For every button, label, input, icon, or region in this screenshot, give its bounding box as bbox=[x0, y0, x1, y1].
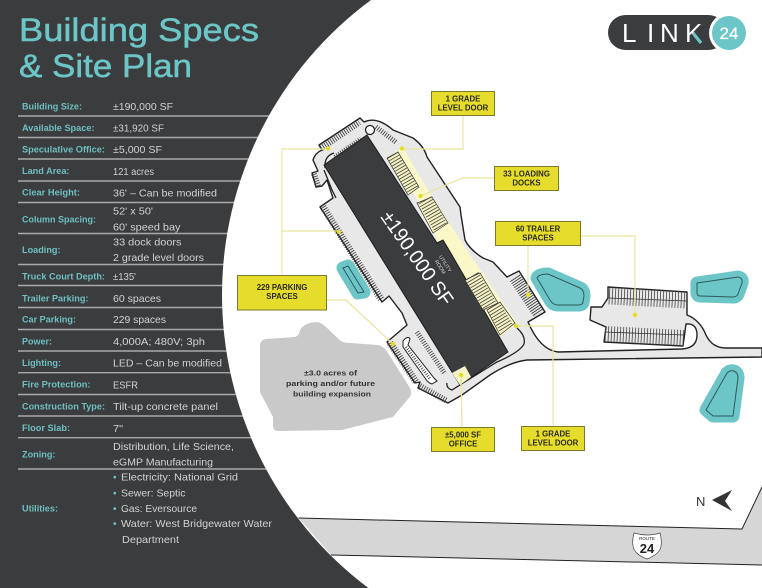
spec labels: Land Area: bbox=[22, 166, 70, 176]
north arrow bbox=[696, 490, 732, 511]
spec values: • bbox=[113, 519, 117, 530]
building: ±190,000 SF bbox=[376, 207, 457, 310]
spec values: Water: West Bridgewater Water bbox=[121, 519, 273, 530]
spec values: 4,000A; 480V; 3ph bbox=[113, 337, 205, 348]
spec labels: Trailer Parking: bbox=[22, 294, 88, 304]
spec values: 60 spaces bbox=[113, 294, 161, 305]
expansion area: building expansion bbox=[293, 390, 371, 398]
callout: 1 grade level door top: 1 GRADE bbox=[446, 94, 480, 104]
spec values: 121 acres bbox=[113, 167, 154, 178]
callout: 60 trailer spaces: SPACES bbox=[522, 234, 554, 242]
callout: 5,000 SF office bbox=[432, 428, 494, 452]
callout: 229 parking spaces: 229 PARKING bbox=[257, 283, 307, 292]
spec labels: Car Parking: bbox=[22, 314, 76, 324]
spec values: • bbox=[113, 472, 117, 484]
spec labels bbox=[22, 102, 105, 514]
callout: 33 loading docks: DOCKS bbox=[512, 178, 541, 188]
callout leaders bbox=[282, 115, 637, 427]
spec values: ESFR bbox=[113, 380, 138, 392]
expansion area: ±3.0 acres of bbox=[304, 368, 358, 378]
utility room label: ROOM bbox=[433, 259, 446, 275]
callout: 1 grade level door top bbox=[432, 92, 494, 116]
logo: LINK bbox=[622, 18, 703, 48]
drive aisle outlines and islands bbox=[324, 126, 524, 390]
spec values: Department bbox=[122, 535, 179, 546]
spec labels: Available Space: bbox=[22, 123, 94, 133]
spec values: Sewer: Septic bbox=[121, 488, 186, 500]
title bbox=[19, 12, 259, 84]
callout: 1 grade level door bottom: 1 GRADE bbox=[536, 430, 570, 438]
loading docks bbox=[387, 152, 515, 335]
building bbox=[324, 135, 508, 385]
spec labels: Truck Court Depth: bbox=[22, 272, 105, 282]
spec values: • bbox=[113, 504, 117, 515]
spec values: ±135' bbox=[113, 272, 136, 283]
callout: 229 parking spaces: SPACES bbox=[266, 292, 298, 301]
spec labels: Lighting: bbox=[22, 358, 61, 368]
spec values: Distribution, Life Science, bbox=[113, 442, 234, 453]
logo bbox=[608, 13, 749, 53]
callout: 60 trailer spaces: 60 TRAILER bbox=[516, 224, 561, 234]
ponds bbox=[343, 266, 742, 416]
title: & Site Plan bbox=[19, 48, 192, 84]
spec values: 60' speed bay bbox=[113, 222, 181, 234]
callout: 1 grade level door bottom: LEVEL DOOR bbox=[528, 438, 579, 448]
callout: 5,000 SF office: OFFICE bbox=[449, 440, 477, 448]
utility room label bbox=[432, 254, 453, 277]
spec values: ±190,000 SF bbox=[113, 102, 173, 113]
north arrow: N bbox=[696, 494, 705, 509]
spec labels: Power: bbox=[22, 336, 52, 346]
spec values: 52' x 50' bbox=[113, 206, 153, 218]
spec values: Electricity: National Grid bbox=[121, 472, 238, 484]
callout: 229 parking spaces bbox=[238, 276, 326, 310]
expansion area bbox=[260, 322, 411, 431]
spec labels: Building Size: bbox=[22, 102, 82, 112]
spec values: eGMP Manufacturing bbox=[113, 458, 213, 468]
parking hatching bbox=[314, 122, 539, 401]
callout: 33 loading docks: 33 LOADING bbox=[503, 170, 550, 178]
callout: 1 grade level door bottom bbox=[522, 426, 584, 450]
spec labels: Clear Height: bbox=[22, 188, 80, 198]
route 24 shield: ROUTE bbox=[639, 536, 655, 541]
spec values: 229 spaces bbox=[113, 315, 166, 326]
spec values: ±31,920 SF bbox=[113, 124, 164, 134]
callout: 33 loading docks bbox=[494, 166, 558, 190]
spec labels: Construction Type: bbox=[22, 402, 105, 412]
highway bbox=[298, 487, 762, 565]
office block bbox=[452, 366, 471, 385]
spec labels: Loading: bbox=[22, 245, 60, 255]
utility room label: UTILITY bbox=[437, 254, 453, 274]
callout: 5,000 SF office: ±5,000 SF bbox=[445, 430, 481, 440]
route 24 shield: 24 bbox=[640, 541, 655, 556]
callout: 1 grade level door top: LEVEL DOOR bbox=[438, 104, 489, 112]
expansion area: parking and/or future bbox=[286, 379, 375, 388]
loading yard bbox=[393, 148, 517, 337]
site pavement and roads bbox=[312, 118, 762, 403]
spec labels: Speculative Office: bbox=[22, 144, 105, 154]
route 24 shield bbox=[633, 533, 661, 559]
spec labels: Zoning: bbox=[22, 450, 56, 460]
spec values: 36' – Can be modified bbox=[113, 188, 217, 200]
spec labels: Floor Slab: bbox=[22, 423, 70, 433]
callout: 60 trailer spaces bbox=[496, 222, 580, 246]
spec values: ±5,000 SF bbox=[113, 145, 162, 156]
spec values: • bbox=[113, 488, 117, 500]
spec labels: Utilities: bbox=[22, 504, 58, 514]
spec values: Gas: Eversource bbox=[121, 504, 197, 515]
spec values bbox=[113, 102, 273, 546]
spec labels: Column Spacing: bbox=[22, 214, 96, 224]
spec labels: Fire Protection: bbox=[22, 380, 90, 390]
spec values: 2 grade level doors bbox=[113, 253, 204, 264]
spec values: LED – Can be modified bbox=[113, 358, 222, 370]
spec values: Tilt-up concrete panel bbox=[113, 402, 218, 413]
trailer stalls bbox=[605, 296, 687, 338]
spec values: 33 dock doors bbox=[113, 238, 182, 248]
title: Building Specs bbox=[19, 12, 259, 48]
spec values: 7" bbox=[113, 424, 123, 435]
logo: 24 bbox=[720, 24, 738, 43]
